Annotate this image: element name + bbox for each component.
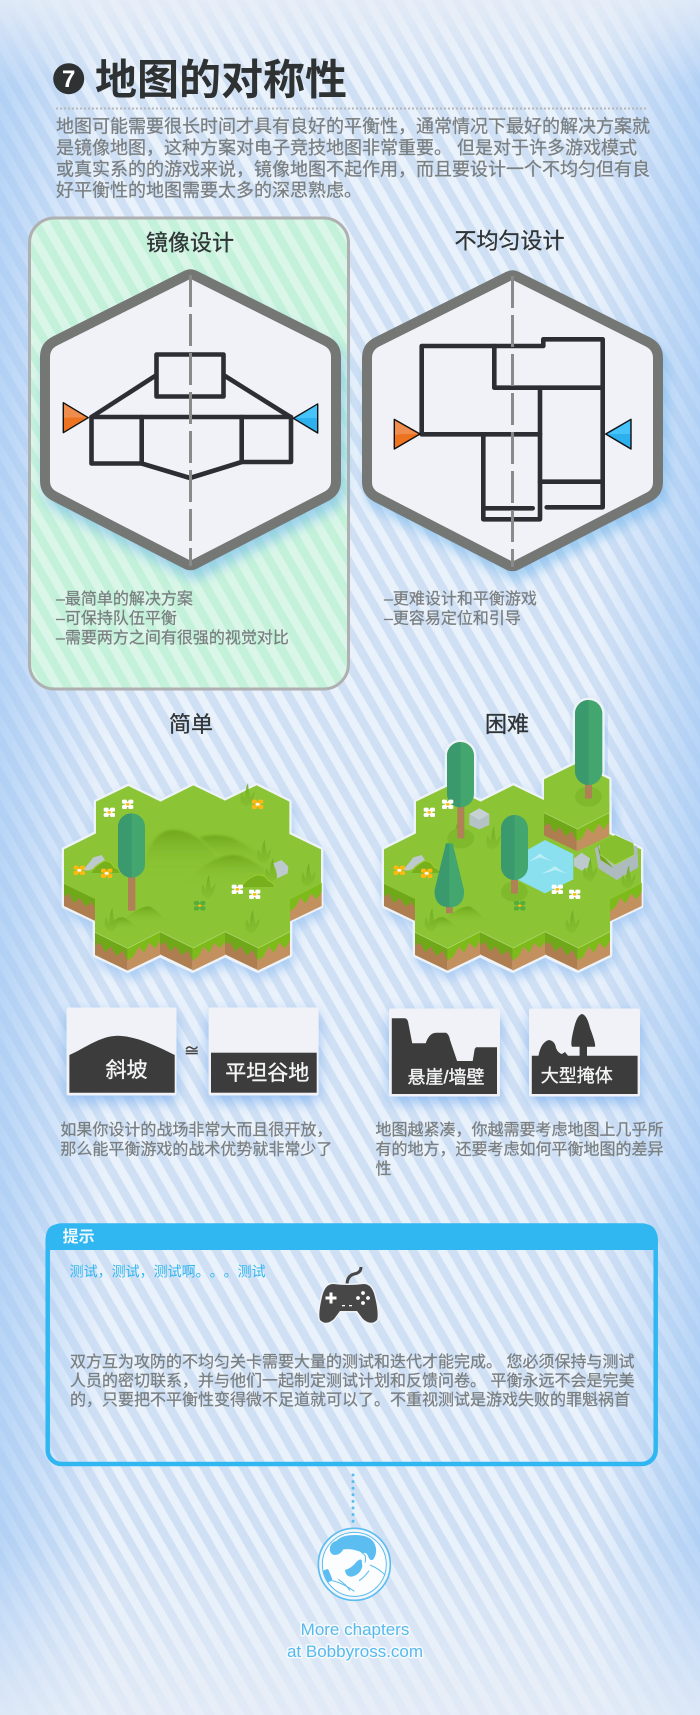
intro text: 或真实系的的游戏来说，镜像地图不起作用，而且要设计一个不均匀但有良 xyxy=(56,160,650,180)
bullet list: asymmetric xyxy=(384,590,537,627)
footer link text: More chapters xyxy=(301,1620,409,1639)
bullet list: mirror xyxy=(56,590,289,647)
panel: mirror design xyxy=(30,218,348,689)
tip body text: 人员的密切联系，并与他们一起制定测试计划和反馈问卷。 平衡永远不会是完美 xyxy=(70,1372,634,1390)
section header xyxy=(53,56,347,104)
heading: simple: 简单 xyxy=(169,712,213,737)
caption: hard xyxy=(376,1121,664,1178)
arrow: blue team xyxy=(293,404,318,433)
tip body text: 双方互为攻防的不均匀关卡需要大量的测试和迭代才能完成。 您必须保持与测试 xyxy=(70,1353,634,1371)
title: 地图的对称性 xyxy=(95,56,347,104)
tip header bar xyxy=(46,1224,657,1250)
caption: simple: 如果你设计的战场非常大而且很开放， xyxy=(60,1121,332,1139)
flowers xyxy=(394,800,580,910)
hexagon map: asymmetric xyxy=(367,275,658,567)
terrain card: large cover: 大型掩体 xyxy=(541,1066,613,1086)
terrain card: slope: 斜坡 xyxy=(106,1059,148,1082)
bullet list: mirror: –需要两方之间有很强的视觉对比 xyxy=(56,629,289,647)
terrain card: large cover xyxy=(529,1008,640,1096)
tip body text: 的，只要把不平衡性变得微不足道就可以了。不重视测试是游戏失败的罪魁祸首 xyxy=(70,1391,630,1409)
tip body text xyxy=(70,1353,634,1409)
tip subtitle: 。 xyxy=(210,1264,224,1280)
flowers xyxy=(74,800,263,910)
heading: asymmetric design: 不均匀设计 xyxy=(454,228,565,254)
arrow: orange team xyxy=(394,419,420,449)
footer link text xyxy=(287,1620,423,1661)
heading: hard: 困难 xyxy=(485,712,529,737)
tip subtitle: 测试 xyxy=(238,1264,266,1280)
tip box xyxy=(46,1224,657,1464)
terrain card: slope xyxy=(66,1008,176,1096)
island: simple terrain xyxy=(64,783,322,971)
grass tufts xyxy=(105,783,316,933)
caption: simple xyxy=(60,1121,332,1158)
bullet list: mirror: –可保持队伍平衡 xyxy=(56,609,177,627)
number badge xyxy=(53,63,84,94)
intro text: 地图可能需要很长时间才具有良好的平衡性，通常情况下最好的解决方案就 xyxy=(56,116,650,136)
hexagon map: mirror xyxy=(45,274,336,566)
tip label: 提示 xyxy=(63,1228,95,1246)
logo: author portrait xyxy=(318,1528,390,1600)
pond xyxy=(518,840,573,893)
arrow: orange team xyxy=(63,403,88,433)
dotted connector xyxy=(352,1475,354,1522)
rolling hills xyxy=(145,830,273,882)
bullet list: asymmetric: –更容易定位和引导 xyxy=(384,609,521,627)
terrain card: flat valley xyxy=(209,1008,319,1096)
grass tufts xyxy=(425,823,580,933)
small hill and rocks xyxy=(403,808,590,930)
number badge: 7 xyxy=(62,66,75,93)
island: hard terrain xyxy=(384,700,642,971)
stone mound xyxy=(583,835,638,889)
caption: hard: 性 xyxy=(376,1160,392,1178)
raised plateau xyxy=(544,763,609,852)
caption: hard: 有的地方，还要考虑如何平衡地图的差异 xyxy=(376,1140,664,1158)
small front hills xyxy=(103,907,168,930)
bullet list: mirror: –最简单的解决方案 xyxy=(56,590,193,608)
panel: asymmetric design xyxy=(367,228,658,627)
rocks and bushes xyxy=(83,855,288,887)
icon: game controller xyxy=(319,1267,378,1323)
tip subtitle: 。 xyxy=(196,1264,210,1280)
intro text: 好平衡性的地图需要太多的深思熟虑。 xyxy=(56,180,362,200)
approx symbol: ≅ xyxy=(184,1043,200,1060)
tip subtitle: 。 xyxy=(224,1264,238,1280)
halos behind island xyxy=(447,700,609,849)
tip subtitle: 测试，测试，测试啊 xyxy=(70,1264,196,1280)
tree xyxy=(118,813,145,911)
intro text: 是镜像地图，这种方案对电子竞技地图非常重要。 但是对于许多游戏模式 xyxy=(56,138,637,158)
terrain card: cliff wall xyxy=(389,1008,500,1096)
bullet list: asymmetric: –更难设计和平衡游戏 xyxy=(384,590,537,608)
trees xyxy=(435,700,602,913)
arrow: blue team xyxy=(606,419,631,449)
heading: mirror design: 镜像设计 xyxy=(146,230,234,256)
footer link text: at Bobbyross.com xyxy=(287,1642,423,1661)
terrain card: cliff wall: 悬崖/墙壁 xyxy=(407,1068,485,1088)
caption: hard: 地图越紧凑，你越需要考虑地图上几乎所 xyxy=(376,1121,664,1139)
terrain card: flat valley: 平坦谷地 xyxy=(225,1062,309,1085)
caption: simple: 那么能平衡游戏的战术优势就非常少了 xyxy=(60,1140,332,1158)
intro text xyxy=(56,116,650,200)
